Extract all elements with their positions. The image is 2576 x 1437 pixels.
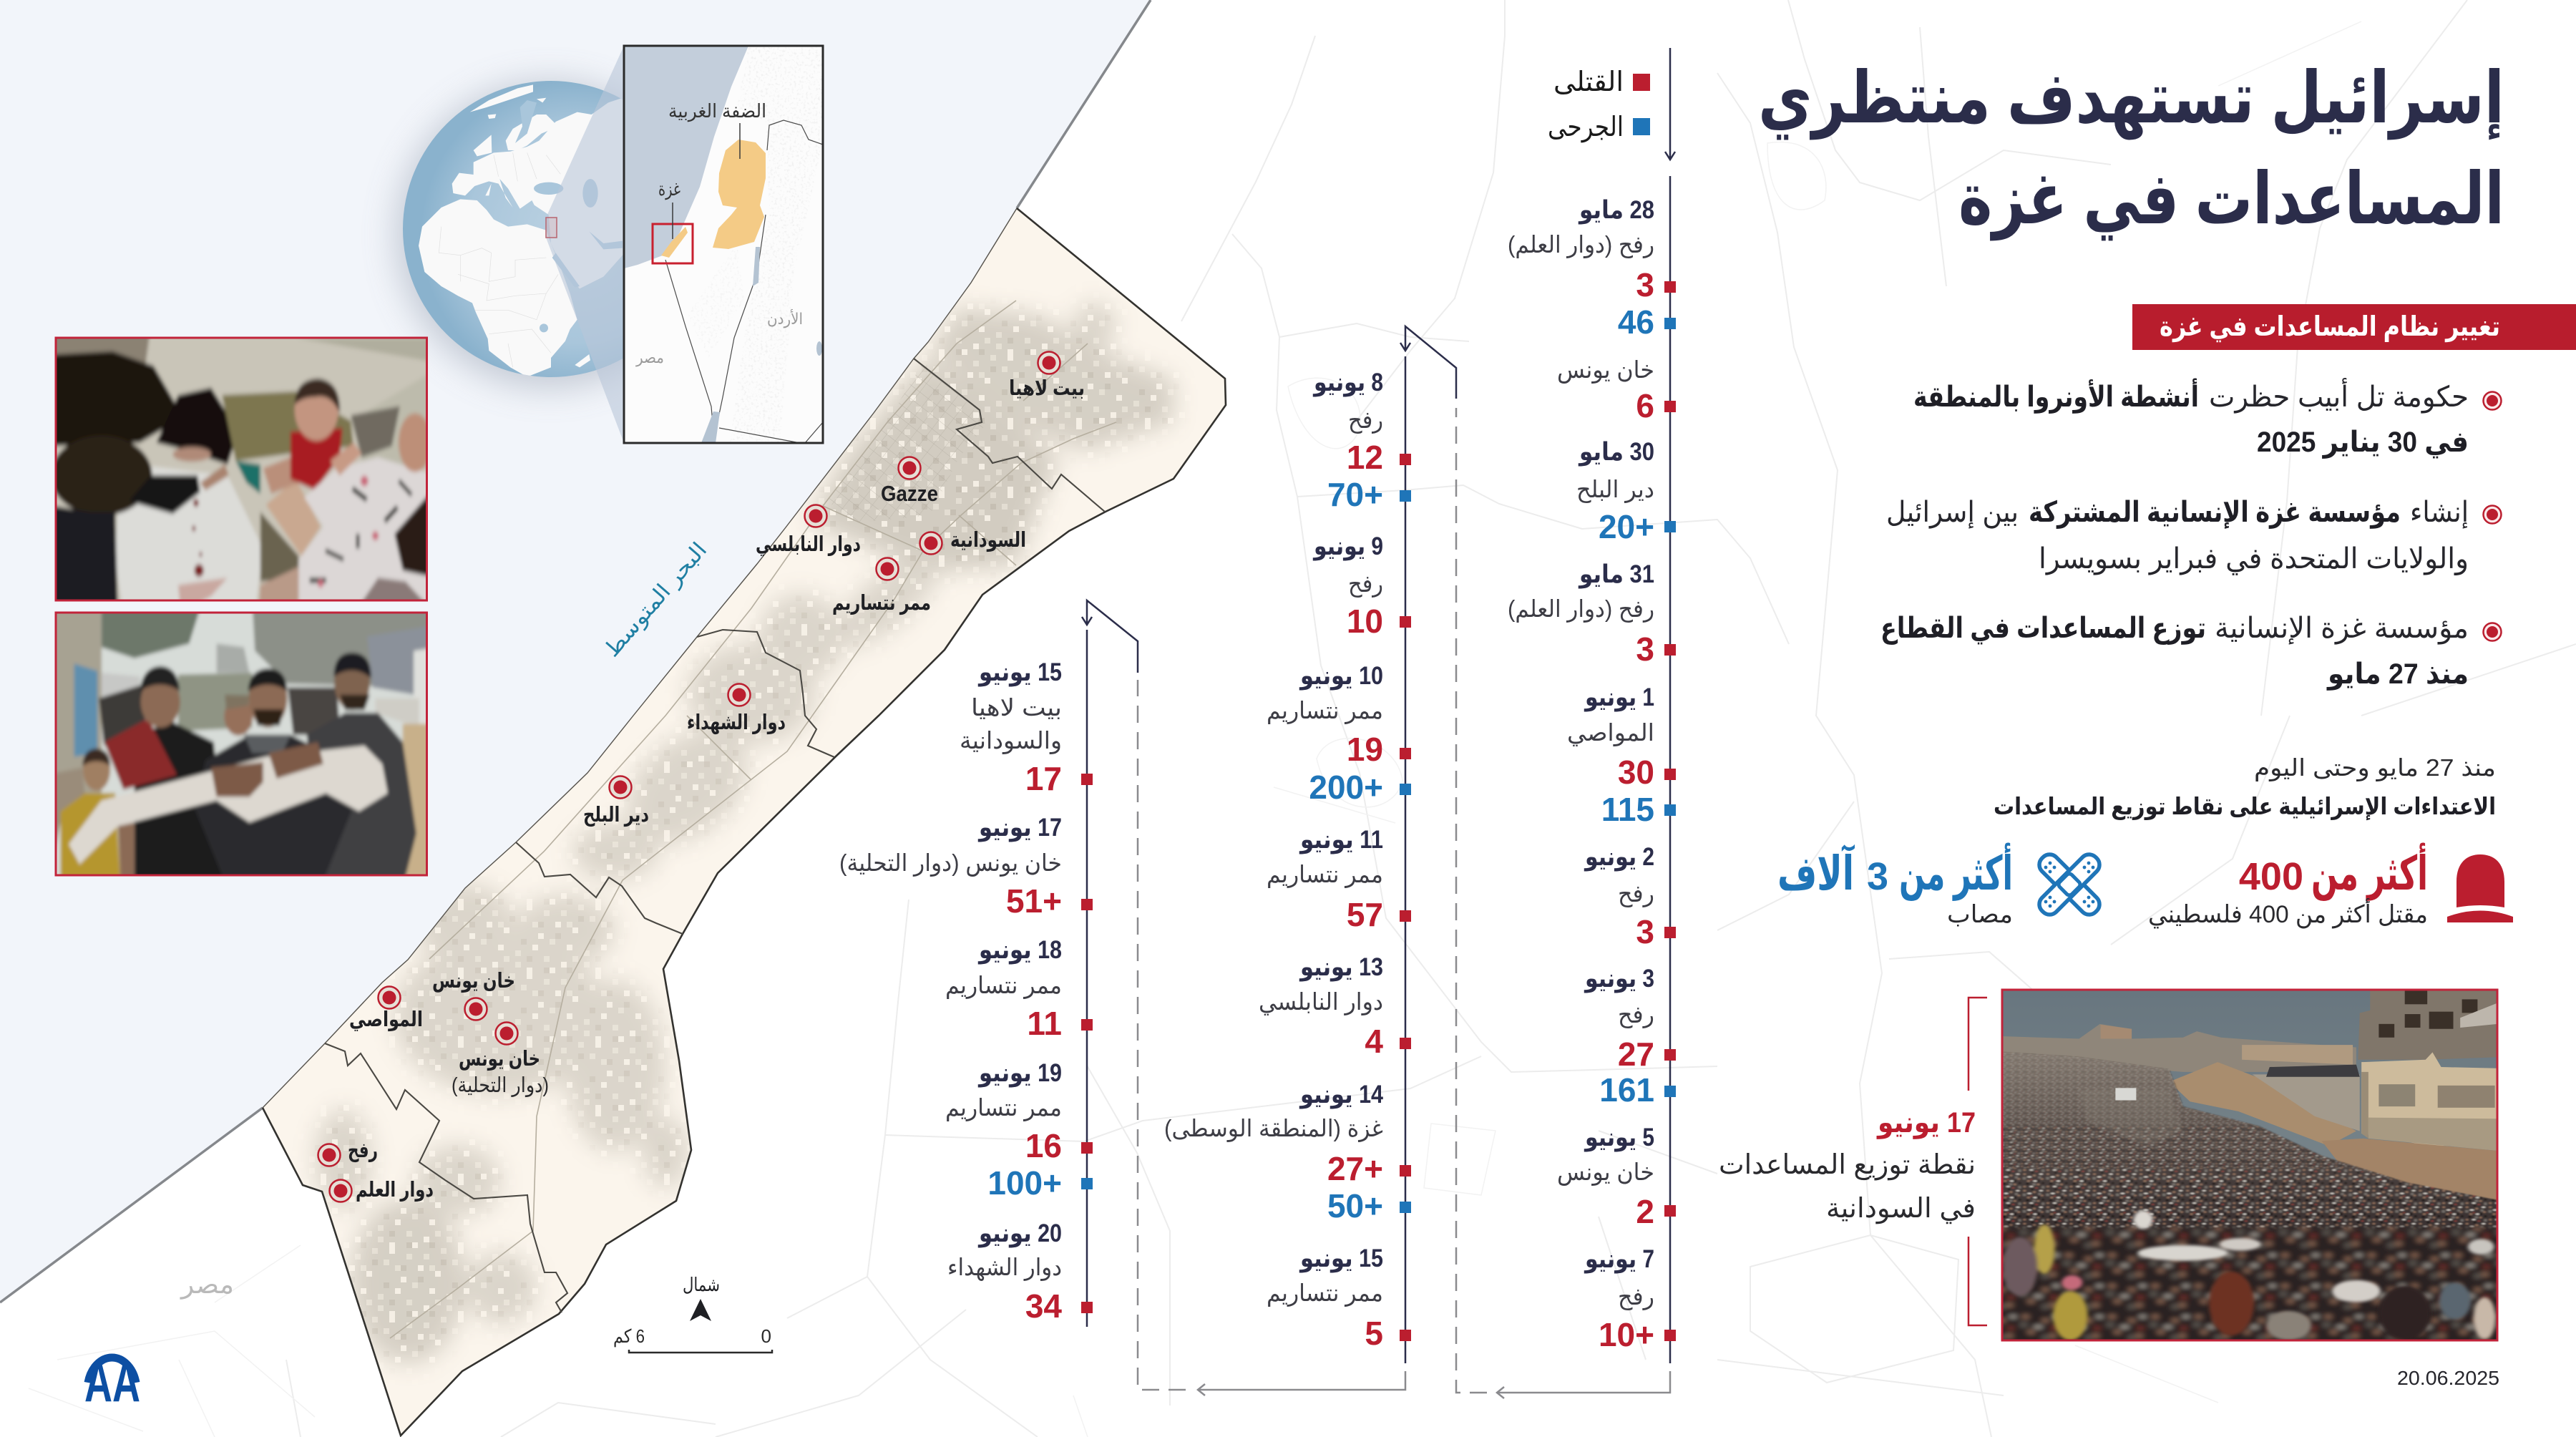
- entry: 15 June: [960, 658, 1093, 797]
- inset frame: [624, 46, 823, 443]
- stat: killed: مقتل أكثر من 400 فلسطيني: [2148, 898, 2428, 929]
- entry: 19 June: 19 يونيو: [977, 1059, 1062, 1088]
- stats heading: الاعتداءات الإسرائيلية على نقاط توزيع المساعدات: [1994, 793, 2496, 821]
- map place labels: السودانية: [950, 529, 1026, 552]
- bullet 2: مؤسسة غزة الإنسانية المشتركة: [2029, 497, 2401, 529]
- entry: Khan Younis: 6: [1636, 387, 1654, 424]
- stat: killed: أكثر من: [2311, 842, 2428, 901]
- entry: 1 June: 115: [1601, 791, 1654, 828]
- globe locator: [381, 66, 623, 402]
- entry: 17 June: خان يونس (دوار التحلية): [839, 849, 1062, 877]
- AA logo: [84, 1350, 140, 1413]
- entry: 14 June: 14 يونيو: [1299, 1081, 1383, 1109]
- entry: 3 June: 27: [1618, 1036, 1654, 1073]
- stat: wounded: مصاب: [1947, 901, 2013, 928]
- date stamp: 20.06.2025: [2397, 1367, 2499, 1389]
- entry: 14 June: 27+: [1327, 1150, 1383, 1187]
- legend: wounded: الجرحى: [1548, 112, 1624, 143]
- map scale bar: 0: [761, 1325, 771, 1347]
- entry: 8 June: 8 يونيو: [1312, 369, 1383, 397]
- map place labels: المواصي: [349, 1008, 423, 1031]
- location marker: Deir al-Balah: [610, 776, 631, 799]
- bullet 3: مؤسسة غزة الإنسانية: [2215, 613, 2469, 645]
- entry: 11 June: [1267, 826, 1411, 933]
- water bodies: [701, 247, 822, 443]
- entry: 18 June: 11: [1027, 1005, 1062, 1042]
- icon: crossed bandages: [2036, 851, 2103, 918]
- entry: 20 June: 34: [1025, 1287, 1062, 1325]
- bullet 2: [1886, 497, 2502, 575]
- entry: 14 June: 50+: [1327, 1187, 1383, 1224]
- entry: 15 June: والسودانية: [960, 727, 1062, 754]
- entry: 5 June: 2: [1636, 1193, 1654, 1230]
- urban density texture: [308, 298, 1183, 1372]
- inset leader lines: [673, 123, 740, 239]
- locator wedge: [546, 46, 624, 443]
- entry: 30 May: 30 مايو: [1578, 438, 1654, 467]
- Mediterranean Sea label: البحر المتوسط: [600, 538, 711, 662]
- entry: 9 June: 10: [1347, 603, 1383, 640]
- bullet 1: في 30 يناير 2025: [2257, 427, 2469, 459]
- photo: grieving family: [47, 326, 436, 614]
- entry: 7 June: 10+: [1599, 1316, 1654, 1353]
- map place labels: ممر نتساريم: [832, 592, 931, 615]
- timeline column 1: [1508, 196, 1676, 1353]
- stat: killed: [2148, 842, 2513, 929]
- map place labels: دوار العلم: [356, 1179, 434, 1202]
- entry: 18 June: [945, 936, 1093, 1042]
- entry: 15 June: 15 يونيو: [1299, 1244, 1383, 1273]
- bullet 3: منذ 27 مايو: [2326, 658, 2469, 691]
- photo: crowd at aid distribution point: [1989, 990, 2509, 1350]
- entry: 15 June: بيت لاهيا: [971, 694, 1062, 721]
- sea background: [0, 0, 1151, 1302]
- terrain shading: [687, 46, 823, 443]
- inset labels: الضفة الغربية: [668, 100, 766, 122]
- entry: 10 June: 200+: [1309, 769, 1383, 806]
- Gaza Strip area: [263, 208, 1226, 1436]
- entry: Khan Younis: خان يونس: [1557, 356, 1654, 384]
- entry: 28 May: رفح (دوار العلم): [1508, 231, 1654, 258]
- map place labels: دوار النابلسي: [756, 533, 861, 556]
- entry: 3 June: 161: [1599, 1071, 1654, 1109]
- entry: 11 June: ممر نتساريم: [1267, 861, 1383, 888]
- entry: 3 June: [1584, 965, 1676, 1109]
- West Bank: [713, 140, 766, 249]
- map place labels: دوار الشهداء: [687, 711, 786, 734]
- legend: [1548, 67, 1650, 143]
- photo caption: في السودانية: [1826, 1194, 1976, 1224]
- stat: killed: 400: [2239, 855, 2303, 898]
- location marker: Gaza: [899, 457, 920, 479]
- bullet 3: توزع المساعدات في القطاع: [1880, 613, 2206, 645]
- map place labels: دير البلح: [583, 804, 649, 827]
- bullet 2: والولايات المتحدة في فبراير بسويسرا: [2039, 543, 2469, 575]
- inset labels: [635, 100, 803, 366]
- entry: 11 June: 57: [1347, 896, 1383, 933]
- entry: 28 May: 46: [1618, 303, 1654, 341]
- entry: 15 June: 15 يونيو: [977, 658, 1062, 687]
- governorate borders: [325, 359, 1105, 1312]
- entry: 18 June: ممر نتساريم: [945, 972, 1062, 999]
- entry: 13 June: 13 يونيو: [1299, 953, 1383, 982]
- entry: 10 June: [1267, 662, 1411, 806]
- entry: 31 May: 3: [1636, 630, 1654, 668]
- entry: 2 June: 2 يونيو: [1584, 843, 1654, 872]
- location marker: Rafah: [318, 1144, 341, 1166]
- entry: 20 June: [947, 1219, 1093, 1325]
- inset labels: الأردن: [767, 309, 803, 328]
- entry: 19 June: 16: [1025, 1127, 1062, 1164]
- section banner: [2132, 304, 2576, 350]
- continents: [419, 84, 630, 377]
- entry: 28 May: 3: [1636, 266, 1654, 303]
- bullet 1: [1913, 378, 2502, 459]
- entry: 19 June: [945, 1059, 1093, 1202]
- stats heading: منذ 27 مايو وحتى اليوم: [2254, 754, 2496, 781]
- section banner: تغيير نظام المساعدات في غزة: [2160, 312, 2500, 343]
- stat: wounded: آلاف: [1777, 844, 1855, 900]
- Gaza highlight rectangle: [653, 224, 693, 263]
- inset land: [624, 46, 823, 443]
- bullet 3: [1880, 613, 2502, 691]
- entry: 30 May: 20+: [1599, 508, 1654, 545]
- land border of Gaza: [263, 208, 1226, 1436]
- map: Gaza Strip: [262, 208, 1226, 1437]
- photo caption: نقطة توزيع المساعدات: [1719, 1150, 1976, 1181]
- AA logo: AA: [84, 1350, 140, 1413]
- entry: 3 June: رفح: [1618, 1001, 1654, 1028]
- photo caption: [1719, 1107, 1976, 1224]
- entry: 5 June: [1557, 1124, 1676, 1230]
- entry: 14 June: غزة (المنطقة الوسطى): [1164, 1115, 1383, 1142]
- entry: 2 June: 3: [1636, 913, 1654, 950]
- entry: 20 June: دوار الشهداء: [947, 1254, 1062, 1281]
- entry: 19 June: 100+: [987, 1164, 1062, 1202]
- entry: 5 June: 5 يونيو: [1584, 1124, 1654, 1152]
- entry: 10 June: ممر نتساريم: [1267, 697, 1383, 724]
- entry: 15 June: ممر نتساريم: [1267, 1280, 1383, 1307]
- globe ocean: [403, 81, 699, 377]
- stats heading: [1994, 754, 2496, 821]
- icon: gravestone: [2447, 854, 2513, 922]
- entry: 1 June: 30: [1618, 754, 1654, 791]
- entry: 20 June: 20 يونيو: [977, 1219, 1062, 1248]
- entry: 10 June: 10 يونيو: [1299, 662, 1383, 691]
- location marker: Alam: [329, 1179, 352, 1202]
- entry: 17 June: [839, 814, 1093, 920]
- entry: 31 May: 31 مايو: [1578, 560, 1654, 589]
- entry: 14 June: [1164, 1081, 1411, 1224]
- location marker: Nablusi: [804, 505, 827, 527]
- map place labels: (دوار التحلية): [452, 1074, 549, 1097]
- stat: wounded: أكثر من: [1899, 842, 2013, 901]
- inset sea: [624, 46, 748, 268]
- entry: 1 June: [1567, 683, 1676, 828]
- location marker: Mawasi: [378, 986, 401, 1009]
- entry: 15 June: 5: [1365, 1315, 1383, 1352]
- entry: 10 June: 19: [1347, 731, 1383, 768]
- stat: wounded: 3: [1867, 855, 1888, 898]
- map place labels: خان يونس: [459, 1048, 540, 1071]
- north arrow: شمال: [683, 1274, 720, 1295]
- location marker: Netzarim: [876, 558, 899, 580]
- entry: 1 June: المواصي: [1567, 719, 1654, 746]
- map place labels: Gazze: [881, 481, 938, 506]
- bullet 1: أنشطة الأونروا بالمنطقة: [1913, 378, 2199, 414]
- stat: wounded: [1777, 842, 2103, 928]
- location marker: Beit Lahia: [1038, 352, 1060, 374]
- entry: 19 June: ممر نتساريم: [945, 1094, 1062, 1121]
- photo caption: 17 يونيو: [1876, 1107, 1976, 1139]
- map scale bar: 6 كم: [613, 1325, 645, 1348]
- country borders: [439, 152, 560, 367]
- locator rectangle on globe: [546, 218, 557, 238]
- entry: 31 May: [1508, 560, 1676, 668]
- photo caption bracket: [1968, 998, 1987, 1325]
- entry: 28 May: 28 مايو: [1578, 196, 1654, 225]
- north arrow: [683, 1274, 720, 1321]
- entry: 17 June: 51+: [1006, 882, 1062, 920]
- location marker: Khan Younis: [465, 998, 487, 1020]
- inset labels: غزة: [658, 178, 680, 200]
- location marker: Tahliya: [495, 1022, 518, 1045]
- entry: 9 June: [1312, 532, 1411, 640]
- entry: 8 June: 12: [1347, 439, 1383, 476]
- location marker: Shuhada: [728, 684, 750, 706]
- entry: 28 May: [1508, 196, 1676, 341]
- inset labels: مصر: [635, 349, 664, 366]
- entry: 3 June: 3 يونيو: [1584, 965, 1654, 993]
- entry: 31 May: رفح (دوار العلم): [1508, 595, 1654, 623]
- entry: 15 June: [1267, 1244, 1411, 1352]
- borders: [665, 120, 823, 443]
- map scale bar: [613, 1325, 772, 1353]
- entry: 13 June: 4: [1365, 1023, 1383, 1060]
- entry: Khan Younis: [1557, 356, 1676, 424]
- inset map: Palestine: [624, 46, 823, 443]
- location marker: Sudania: [920, 532, 942, 554]
- timeline column 2: [1164, 369, 1411, 1352]
- Gaza on inset: [661, 227, 688, 258]
- entry: 7 June: 7 يونيو: [1584, 1245, 1654, 1274]
- entry: 8 June: [1312, 369, 1411, 513]
- coast outline of Gaza: [263, 208, 1017, 1108]
- globe shadow: [396, 82, 703, 388]
- entry: 9 June: 9 يونيو: [1312, 532, 1383, 561]
- entry: 30 May: دير البلح: [1576, 476, 1654, 503]
- entry: 13 June: دوار النابلسي: [1259, 988, 1383, 1015]
- map place labels: خان يونس: [432, 970, 515, 993]
- bullet 2: بين إسرائيل: [1886, 497, 2019, 529]
- entry: 7 June: [1584, 1245, 1676, 1353]
- title: [1758, 58, 2504, 241]
- entry: 7 June: رفح: [1618, 1283, 1654, 1310]
- entry: 9 June: رفح: [1348, 570, 1383, 598]
- entry: 2 June: رفح: [1618, 880, 1654, 907]
- entry: 8 June: 70+: [1327, 476, 1383, 513]
- entry: 30 May: [1576, 438, 1676, 545]
- entry: 15 June: 17: [1025, 760, 1062, 797]
- entry: 8 June: رفح: [1348, 406, 1383, 434]
- legend: killed: القتلى: [1553, 67, 1624, 97]
- entry: 17 June: 17 يونيو: [977, 814, 1062, 842]
- map place labels: [348, 377, 1085, 1202]
- entry: 13 June: [1259, 953, 1411, 1060]
- entry: 1 June: 1 يونيو: [1584, 683, 1654, 712]
- timeline connector lines: [1082, 48, 1675, 1398]
- timeline column 3: [839, 658, 1093, 1325]
- photo: man carrying shrouded child: [47, 600, 436, 888]
- Egypt label: مصر: [180, 1270, 234, 1300]
- bullet 2: إنشاء: [2410, 497, 2469, 529]
- entry: 2 June: [1584, 843, 1676, 950]
- entry: 18 June: 18 يونيو: [977, 936, 1062, 965]
- map place labels: رفح: [348, 1139, 378, 1162]
- bullet 1: حكومة تل أبيب حظرت: [2209, 378, 2469, 414]
- entry: 5 June: خان يونس: [1557, 1159, 1654, 1186]
- entry: 11 June: 11 يونيو: [1299, 826, 1383, 854]
- Egypt and Israel border coast lines: [0, 0, 1151, 1302]
- inland seas: [515, 100, 623, 332]
- map place labels: بيت لاهيا: [1009, 377, 1085, 400]
